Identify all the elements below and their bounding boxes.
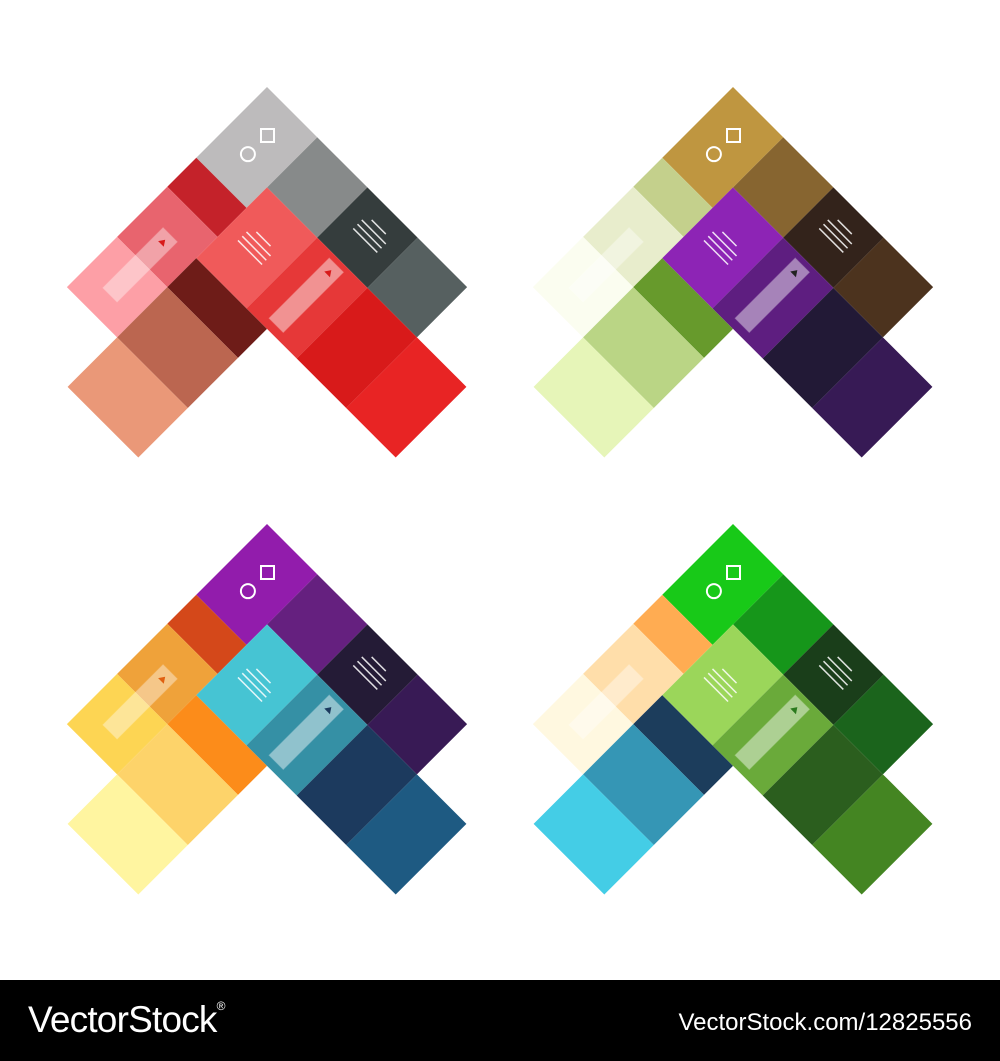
footer logo text: VectorStock® (28, 999, 225, 1040)
chevron: red / gray (top left) (17, 87, 517, 586)
chevron: purple / orange / blue (bottom left) (17, 524, 517, 1023)
chevron: brown / green / purple (top right) (483, 87, 983, 586)
chevron: green / peach / blue (bottom right) (483, 524, 983, 1023)
footer url text: VectorStock.com/12825556 (678, 1009, 972, 1036)
footer bar (0, 980, 1000, 1061)
